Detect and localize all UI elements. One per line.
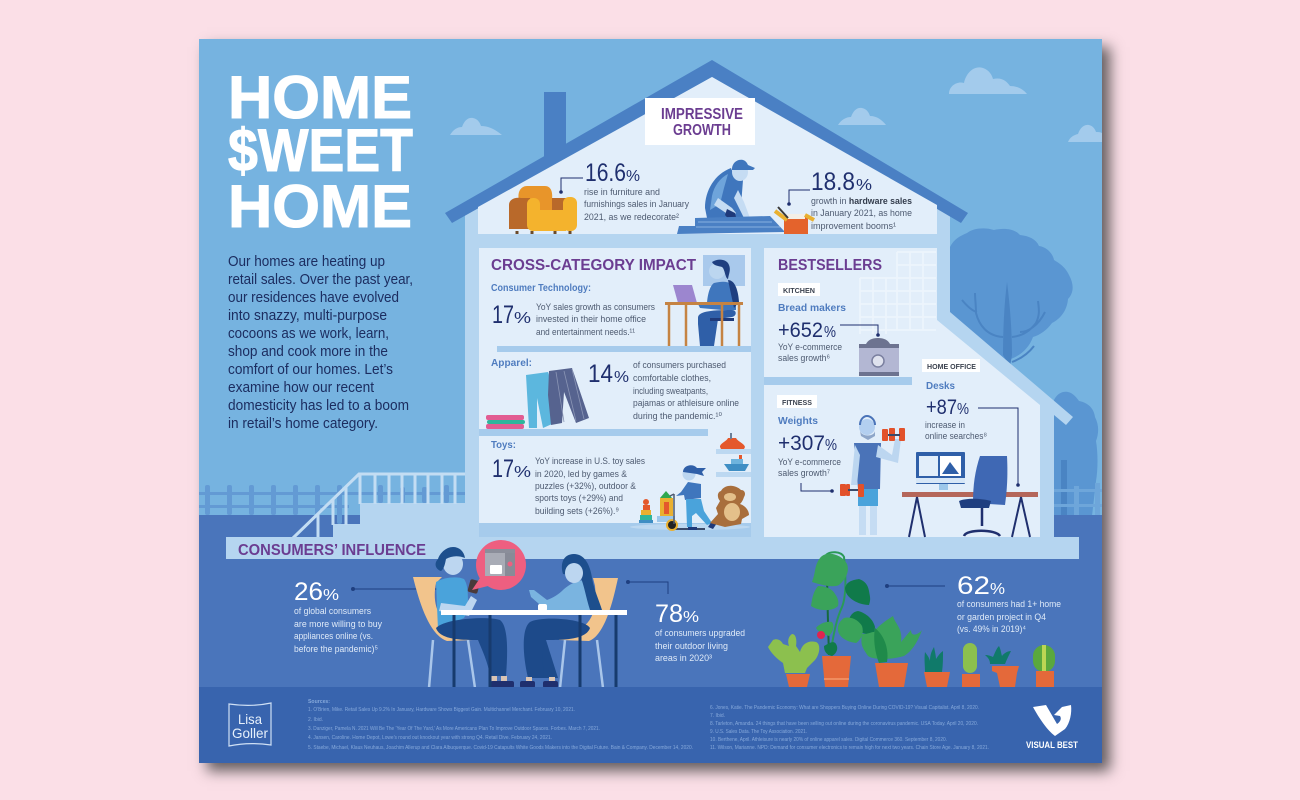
title: $WEET xyxy=(228,117,413,184)
icon: folded clothes and pants xyxy=(486,368,589,429)
subheading: consumer technology: Consumer Technology: xyxy=(491,282,591,294)
stat: toys: puzzles (+32%), outdoor & xyxy=(535,481,637,492)
title xyxy=(228,64,413,240)
stat: global consumers: 26 xyxy=(294,578,323,606)
sources right column: 8. Tarleton, Amanda. 24 things that have been selling out online during the coronavirus pandemic. USA Today. April 20, 2020. xyxy=(710,721,978,727)
sources right column: 6. Jones, Katie. The Pandemic Economy: What are Shoppers Buying Online During COVID-19? Visual Capitalist. April 8, 2020. xyxy=(710,705,979,711)
stat: hardware: % xyxy=(856,177,872,194)
stat: consumer technology: 17 xyxy=(492,301,514,329)
stat: furniture: 16.6 xyxy=(585,159,626,187)
stat: furniture: rise in furniture and xyxy=(584,187,660,198)
stat: hardware: 18.8 xyxy=(811,168,855,196)
fence right xyxy=(1054,483,1102,515)
heading: impressive growth xyxy=(645,98,755,145)
stat: hardware: growth in hardware sales xyxy=(811,196,912,207)
sources right column: 10. Berthene, April. Athleisure is nearly 20% of online apparel sales. Digital Commerce 360. September 8, 2020. xyxy=(710,737,947,743)
intro text: cocoons as we work, learn, xyxy=(228,326,389,342)
logo: Lisa Goller: Lisa xyxy=(238,711,262,727)
tag: kitchen xyxy=(778,283,820,296)
stat: desks: +87 xyxy=(926,396,957,419)
kitchen tile wall xyxy=(860,252,936,334)
sources left column: 3. Danziger, Pamela N. 2021 Will Be The ‘Year Of The Yard,’ As More Americans Plan To Improve Outdoor Spaces. Forbes. March 7, 2021. xyxy=(308,726,600,732)
stat: bread makers xyxy=(778,302,880,364)
sources left column: 4. Jansen, Caroline. Home Depot, Lowe’s round out knockout year with strong Q4. Retail Dive. February 24, 2021. xyxy=(308,735,552,741)
stat: weights: % xyxy=(825,437,837,454)
bestsellers panel xyxy=(764,248,1040,537)
stat: furniture: furnishings sales in January xyxy=(584,199,689,210)
icon: coffee machine bubble xyxy=(472,540,526,590)
sky background xyxy=(199,39,1102,763)
stat: toys: building sets (+26%).⁹ xyxy=(535,506,619,517)
intro text: examine how our recent xyxy=(228,380,374,396)
heading: bestsellers: BESTSELLERS xyxy=(778,257,882,274)
stat: garden project: or garden project in Q4 xyxy=(957,612,1047,623)
subheading: toys: Toys: xyxy=(491,439,516,451)
stat: bread makers: YoY e-commerce xyxy=(778,342,842,353)
stat: desks: % xyxy=(957,401,969,418)
tag: home office xyxy=(922,359,980,372)
stat: consumer technology: and entertainment needs.¹¹ xyxy=(536,327,635,338)
intro text xyxy=(228,254,413,432)
illustration: worker laying floor xyxy=(677,160,785,234)
stat: consumer technology xyxy=(492,301,655,338)
cross-category panel xyxy=(479,248,751,523)
stat: global consumers: are more willing to buy xyxy=(294,619,382,630)
stat: hardware xyxy=(787,168,912,232)
subheading: apparel: Apparel: xyxy=(491,357,532,369)
tag: fitness: FITNESS xyxy=(782,398,812,407)
stat: bread makers: % xyxy=(824,324,836,341)
stat: hardware: in January 2021, as home xyxy=(811,208,912,219)
stat: weights xyxy=(778,415,841,493)
icon: armchair xyxy=(509,186,577,234)
trees behind the house xyxy=(950,228,1098,516)
stat: desks: increase in xyxy=(925,420,965,431)
sources right column: 11. Wilson, Marianne. NPD: Demand for consumer electronics to remain high for next two years. Chain Store Age. January 8, 2021. xyxy=(710,745,989,751)
sources left column: Sources: xyxy=(308,699,330,705)
stat: weights: YoY e-commerce xyxy=(778,457,841,468)
illustration: man lifting weights xyxy=(840,416,905,535)
icon: bread maker xyxy=(859,338,899,376)
kitchen shelf xyxy=(764,377,912,385)
stat: apparel: comfortable clothes, xyxy=(633,373,711,384)
logo: Visual Best: VISUAL BEST xyxy=(1026,740,1078,750)
stat: outdoor living: areas in 2020³ xyxy=(655,653,712,664)
staircase xyxy=(293,474,465,538)
stat: global consumers: % xyxy=(323,587,339,604)
stat: toys: sports toys (+29%) and xyxy=(535,493,623,504)
stat: global consumers: before the pandemic)⁵ xyxy=(294,644,378,655)
title: HOME xyxy=(228,64,412,131)
stat: furniture: % xyxy=(626,168,640,185)
illustration: woman at desk xyxy=(665,255,745,346)
heading: impressive growth: IMPRESSIVE xyxy=(661,106,743,123)
stat: apparel: 14 xyxy=(588,360,613,388)
stat: consumer technology: invested in their home office xyxy=(536,314,646,325)
icon: toolbox xyxy=(775,207,814,234)
intro text: Our homes are heating up xyxy=(228,254,385,270)
sources left column xyxy=(308,699,693,751)
sources left column: 5. Staebe, Michael, Klaus Neuhaus, Joachim Allerup and Clara Albuquerque. Covid-19 Catapults White Goods Makers into the Digital Future. Bain & Company. December 14, 2020. xyxy=(308,745,693,751)
stat: outdoor living: 78 xyxy=(655,600,683,628)
sources right column xyxy=(710,705,989,751)
stat: toys xyxy=(492,455,645,517)
cross-category shelves xyxy=(479,346,751,537)
attic panel xyxy=(478,77,937,234)
stat: toys: % xyxy=(514,464,531,481)
illustration: two women at table xyxy=(413,547,627,688)
stat: desks: Desks xyxy=(926,380,955,392)
intro text: our residences have evolved xyxy=(228,290,399,306)
stat: toys: YoY increase in U.S. toy sales xyxy=(535,456,645,467)
logo: Lisa Goller xyxy=(229,703,271,746)
stat: outdoor living xyxy=(626,580,745,664)
stat: weights: sales growth⁷ xyxy=(778,468,830,479)
clouds xyxy=(450,67,1102,142)
stat: furniture: 2021, as we redecorate² xyxy=(584,212,680,223)
stat: weights: +307 xyxy=(778,432,825,455)
stat: consumer technology: YoY sales growth as consumers xyxy=(536,302,655,313)
heading: cross-category impact: CROSS-CATEGORY IMPACT xyxy=(491,257,697,274)
stat: apparel: pajamas or athleisure online xyxy=(633,398,739,409)
stat: desks: online searches⁸ xyxy=(925,431,987,442)
stat: outdoor living: their outdoor living xyxy=(655,641,728,652)
intro text: into snazzy, multi-purpose xyxy=(228,308,387,324)
stat: garden project: 62 xyxy=(957,572,990,600)
stat: garden project xyxy=(885,572,1061,635)
stat: bread makers: sales growth⁶ xyxy=(778,353,830,364)
title: HOME xyxy=(228,173,412,240)
stat: apparel: of consumers purchased xyxy=(633,360,726,371)
tag: home office: HOME OFFICE xyxy=(927,362,976,371)
stat: apparel xyxy=(588,360,739,422)
fence left xyxy=(199,485,465,524)
stat: bread makers: +652 xyxy=(778,319,823,342)
heading: consumers' influence: CONSUMERS’ INFLUENCE xyxy=(238,542,426,559)
tag: kitchen: KITCHEN xyxy=(783,286,815,295)
stat: apparel: including sweatpants, xyxy=(633,386,708,397)
stat: garden project: (vs. 49% in 2019)⁴ xyxy=(957,624,1026,635)
icon: girl on scooter with toys and teddy xyxy=(630,465,750,530)
stat: global consumers xyxy=(294,578,453,655)
stat: garden project: of consumers had 1+ home xyxy=(957,599,1061,610)
intro text: shop and cook more in the xyxy=(228,344,388,360)
stat: global consumers: of global consumers xyxy=(294,606,371,617)
stat: global consumers: appliances online (vs. xyxy=(294,631,373,642)
stat: bread makers: Bread makers xyxy=(778,302,846,314)
tag: fitness xyxy=(777,395,817,408)
sources right column: 7. Ibid. xyxy=(710,713,725,719)
stat: outdoor living: of consumers upgraded xyxy=(655,628,745,639)
logo: Visual Best xyxy=(1026,705,1078,750)
stat: consumer technology: % xyxy=(514,310,531,327)
icon: toy shelves with car and boat xyxy=(716,433,751,477)
ground xyxy=(199,515,1102,687)
stat: furniture xyxy=(559,159,689,223)
sources left column: 1. O’Brien, Mike. Retail Sales Up 9.2% In January, Hardware Shows Biggest Gain. Multichannel Merchant. February 10, 2021. xyxy=(308,707,575,713)
illustration: desk with monitor and chair xyxy=(902,452,1038,537)
stat: apparel: % xyxy=(614,369,629,386)
stat: toys: in 2020, led by games & xyxy=(535,469,628,480)
intro text: comfort of our homes. Let’s xyxy=(228,362,393,378)
chimney xyxy=(544,92,566,162)
house body xyxy=(226,72,1079,559)
stat: weights: Weights xyxy=(778,415,818,427)
stat: desks xyxy=(925,380,1020,487)
intro text: domesticity has led to a boom xyxy=(228,398,409,414)
stat: garden project: % xyxy=(990,581,1005,598)
intro text: retail sales. Over the past year, xyxy=(228,272,413,288)
intro text: in retail’s home category. xyxy=(228,416,378,432)
roof xyxy=(445,60,968,223)
footer band xyxy=(199,687,1102,763)
stat: hardware: improvement booms¹ xyxy=(811,221,896,232)
sources left column: 2. Ibid. xyxy=(308,717,323,723)
stat: outdoor living: % xyxy=(683,609,699,626)
stat: apparel: during the pandemic.¹⁰ xyxy=(633,411,722,422)
stat: toys: 17 xyxy=(492,455,514,483)
sources right column: 9. U.S. Sales Data. The Toy Association. 2021. xyxy=(710,729,807,735)
logo: Lisa Goller: Goller xyxy=(232,725,268,741)
illustration: potted plants xyxy=(768,552,1055,687)
heading: impressive growth: GROWTH xyxy=(673,122,731,139)
